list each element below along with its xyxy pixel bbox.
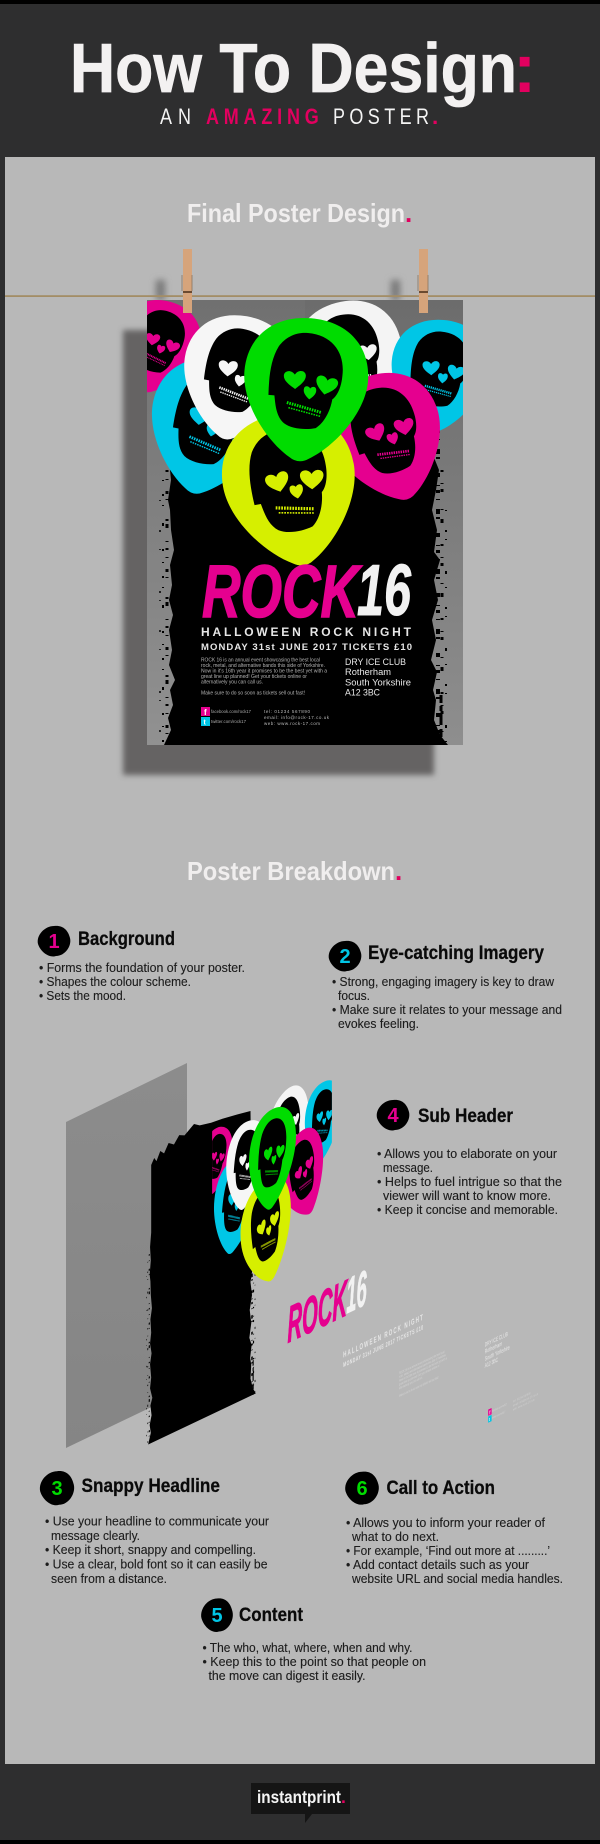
bullet text [39, 960, 245, 1003]
poster sheet [147, 300, 463, 745]
section 5: content [201, 1598, 426, 1683]
section 1: background [38, 926, 245, 1003]
bullet text: • The who, what, where, when and why. [202, 1640, 412, 1655]
badge 3: 3 [51, 1478, 63, 1500]
bullet text: • For example, ‘Find out more at .........’ [346, 1543, 550, 1558]
right peg [418, 249, 428, 313]
bullet text: • Helps to fuel intrigue so that the [377, 1174, 562, 1189]
left peg [182, 249, 192, 313]
badge 1 [38, 926, 70, 956]
bullet text: • Keep this to the point so that people on [202, 1654, 426, 1669]
title: : [513, 29, 536, 107]
layer: guitar picks [197, 1050, 343, 1330]
badge 6: 6 [356, 1478, 368, 1500]
subtitle: . [432, 104, 438, 129]
bullet text: • Sets the mood. [39, 988, 126, 1003]
bullet text: what to do next. [351, 1529, 439, 1544]
bullet text: seen from a distance. [51, 1571, 167, 1586]
poster address [345, 657, 411, 698]
poster contact details [264, 709, 330, 726]
poster shadow [123, 330, 434, 775]
poster social icons [201, 707, 252, 726]
instantprint logo: instantprint [257, 1787, 341, 1807]
subtitle: AN [160, 105, 191, 130]
heading: Snappy Headline [82, 1476, 220, 1497]
bullet text: • Make sure it relates to your message and [332, 1002, 562, 1017]
section 3: snappy headline [40, 1471, 270, 1586]
bullet text: message. [383, 1160, 433, 1175]
layer: body copy [399, 1348, 447, 1398]
badge 4: 4 [387, 1105, 399, 1127]
badge 6 [345, 1472, 379, 1505]
bullet text: website URL and social media handles. [351, 1571, 563, 1586]
subtitle [160, 104, 438, 130]
bullet text: • Allows you to elaborate on your [377, 1146, 558, 1161]
section 2: eye-catching imagery [329, 941, 562, 1031]
bullet text [332, 974, 562, 1031]
header: title and subtitle [70, 29, 536, 130]
instantprint logo: . [341, 1787, 346, 1807]
heading: poster breakdown: Poster Breakdown [187, 856, 395, 886]
bullet text: • Add contact details such as your [346, 1557, 530, 1572]
black grunge layer [159, 430, 448, 745]
layer: black grunge [147, 1095, 256, 1445]
heading: final poster design: . [405, 198, 412, 228]
badge 3 [40, 1471, 74, 1505]
heading: Call to Action [386, 1478, 495, 1499]
poster sub header [201, 625, 412, 653]
bullet text: • Strong, engaging imagery is key to draw [332, 974, 555, 989]
bullet text: • Keep it short, snappy and compelling. [45, 1542, 256, 1557]
layer: social icons [488, 1400, 508, 1423]
layer: textured background [66, 1063, 187, 1448]
exploded poster diagram [66, 1050, 538, 1448]
subtitle: POSTER [333, 105, 429, 130]
badge 4 [377, 1100, 409, 1130]
peg shadows [156, 280, 400, 300]
bullet text [346, 1515, 563, 1586]
heading: final poster design: Final Poster Design [187, 198, 405, 228]
badge 2: 2 [339, 946, 351, 968]
bullet text: • Allows you to inform your reader of [346, 1515, 545, 1530]
bullet text: the move can digest it easily. [208, 1668, 366, 1683]
poster headline: ROCK16 [202, 550, 412, 633]
bullet text: • Shapes the colour scheme. [39, 974, 191, 989]
bullet text [377, 1146, 562, 1217]
layer: contact details [513, 1387, 538, 1412]
bullet text: • Use a clear, bold font so it can easily be [45, 1556, 268, 1572]
badge 2 [329, 941, 361, 971]
subtitle: AMAZING [206, 105, 319, 130]
layer: headline [288, 1259, 367, 1354]
bullet text [202, 1640, 426, 1683]
heading: Content [239, 1605, 304, 1626]
badge 5 [201, 1598, 233, 1632]
title: How To Design [70, 29, 517, 107]
clothesline [5, 295, 595, 297]
heading: Eye-catching Imagery [368, 943, 544, 964]
poster hanging on line [5, 249, 595, 775]
instantprint logo [251, 1783, 350, 1823]
bullet text: • Use your headline to communicate your [45, 1514, 270, 1528]
bullet text: message clearly. [51, 1528, 140, 1543]
section 6: call to action [345, 1472, 563, 1586]
section 4: sub header [377, 1100, 562, 1217]
layer: sub header [343, 1314, 423, 1370]
bullet text: viewer will want to know more. [383, 1188, 551, 1203]
bullet text: evokes feeling. [338, 1016, 419, 1031]
layer: address [485, 1330, 510, 1370]
badge 5: 5 [211, 1605, 223, 1627]
heading: Background [78, 929, 175, 950]
guitar picks with skulls [107, 289, 492, 577]
bullet text: • Forms the foundation of your poster. [39, 960, 245, 975]
bullet text [45, 1514, 270, 1586]
badge 1: 1 [48, 931, 60, 953]
bullet text: focus. [338, 988, 370, 1003]
heading: Sub Header [418, 1106, 514, 1127]
poster body copy [201, 658, 327, 696]
bullet text: • Keep it concise and memorable. [377, 1202, 558, 1217]
heading: poster breakdown: . [395, 856, 402, 886]
